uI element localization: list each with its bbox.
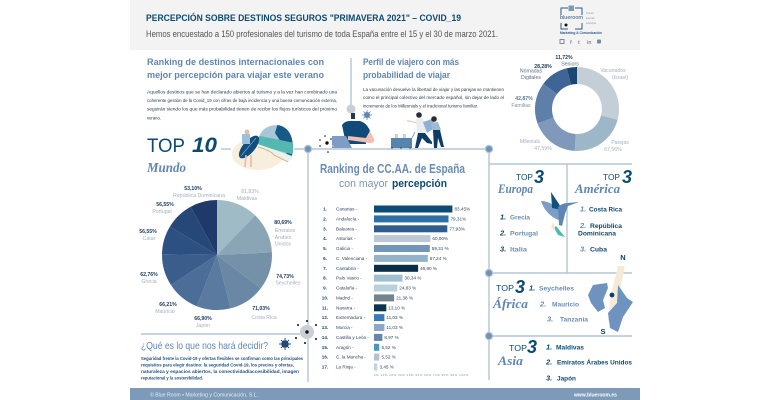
panel: top 3 África: TOP: [496, 283, 514, 293]
perfil text: incremento de los Millennials y el tradicional turismo familiar.: [363, 104, 478, 108]
bar chart: CC.AA.: Extremadura -: [336, 315, 366, 320]
pie labels: 62,76%: [140, 272, 158, 278]
donut chart: [511, 55, 629, 153]
pie labels: Grecia: [141, 279, 157, 285]
bar chart: CC.AA.: 11.: [322, 305, 328, 310]
panel: top 3 América: 3.: [580, 244, 586, 254]
subtitle: Hemos encuestado a 150 profesionales del turismo de toda España entre el 15 y el 30 de marzo 2021.: [146, 29, 498, 39]
logo: blueroom: [560, 15, 583, 21]
social icons: f: [570, 40, 572, 46]
panel: top 3 América: 3: [622, 167, 632, 187]
pie labels: 71,03%: [252, 306, 270, 312]
bar chart: CC.AA.: 5.: [323, 246, 327, 251]
pie labels: 66,21%: [159, 302, 177, 308]
bar chart: CC.AA.: Aragón -: [336, 345, 354, 350]
bar chart: CC.AA.: 24,83 %: [399, 286, 416, 290]
bar chart: CC.AA.: 17.: [322, 364, 328, 370]
heading: perfil de viajero: probabilidad de viajar: [363, 70, 450, 81]
bar chart: CC.AA.: 59,31 %: [432, 246, 449, 251]
pie chart: top 10 mundo: [139, 186, 301, 329]
question text: requisitos para elegir destino: la seguridad Covid-19, los precios y ofertas,: [141, 362, 294, 368]
panel: top 3 Asia: [497, 337, 632, 382]
perfil text: [363, 87, 505, 108]
panel: top 3 América: 2.: [579, 221, 586, 230]
panel: top 3 América: América: [574, 182, 620, 196]
icon: compass map: N: [620, 253, 626, 262]
panel: top 3 Asia: 1.: [546, 342, 552, 352]
bar chart: CC.AA.: 79,31%: [450, 216, 466, 221]
pie labels: [139, 186, 301, 329]
pie labels: Árabes: [275, 234, 292, 241]
icon: hummingbird: [541, 192, 579, 237]
connector lines: [221, 145, 632, 382]
panel: top 3 Europa: 1.: [500, 212, 506, 222]
intro text: verano.: [147, 116, 161, 120]
pie labels: República Dominicana: [173, 193, 225, 199]
bar chart: CC.AA.: 13,10 %: [388, 305, 405, 310]
panel: top 3 África: 2.: [539, 300, 546, 308]
bar chart: CC.AA.: 16.: [322, 355, 328, 360]
panel: top 3 Asia: Asia: [497, 354, 523, 368]
panel: top 3 Asia: Emiratos Árabes Unidos: [557, 358, 632, 366]
heading: ranking internacional: mejor percepción para viajar este verano: [147, 70, 324, 81]
donut labels: Nómadas: [520, 68, 543, 74]
icon: compass map: [588, 253, 633, 336]
bar chart: CC.AA.: Navarra -: [336, 305, 356, 310]
heading: perfil de viajero: Perfil de viajero con más: [363, 57, 459, 68]
panel: top 3 África: [492, 277, 589, 324]
donut labels: Digitales: [521, 75, 541, 81]
pie labels: Seychelles: [275, 280, 301, 286]
donut labels: 47,59%: [534, 146, 552, 152]
panel: top 3 Asia: 3: [527, 337, 537, 357]
bar chart: CC.AA.: 83,45%: [454, 206, 470, 212]
bar chart: CC.AA.: 46,90 %: [420, 266, 437, 271]
panel: top 3 América: [574, 167, 632, 254]
pie labels: Maldivas: [237, 196, 258, 202]
bar chart: CC.AA.: País Vasco -: [336, 276, 362, 281]
bar chart: CC.AA.: 15.: [322, 345, 328, 350]
panel: top 3 América: TOP: [603, 172, 620, 182]
ranking heading: [320, 162, 466, 190]
icon: compass map: S: [600, 327, 606, 336]
donut labels: 67,56%: [604, 147, 622, 153]
question heading: ¿Qué es lo que nos hará decidir?: [141, 340, 268, 352]
panel: top 3 Europa: Europa: [497, 182, 533, 196]
panel: top 3 Europa: Grecia: [510, 214, 531, 222]
panel: top 3 Asia: Japón: [557, 376, 576, 382]
bar chart: CC.AA.: 30,34 %: [404, 276, 421, 281]
panel: top 3 Asia: 2.: [545, 358, 552, 366]
bar chart: CC.AA.: 2.: [323, 216, 327, 221]
intro text: coherente gestión de la Covid_19 con cifras de baja incidencia y una buena comunicación externa,: [147, 98, 337, 103]
donut labels: Familias: [511, 103, 531, 109]
panel: top 3 América: 1.: [580, 204, 586, 214]
footer: [130, 388, 640, 400]
panel: top 3 África: 1.: [529, 284, 535, 292]
donut labels: 11,72%: [555, 55, 573, 61]
panel: top 3 África: 3: [515, 277, 525, 297]
intro text: seguirán siendo los que más probabilidad tienen de recibir los flujos turísticos del próximo: [147, 106, 338, 112]
bar chart: CC.AA.: Galicia -: [336, 246, 353, 251]
donut labels: Parejas: [611, 140, 629, 146]
pie labels: 53,10%: [184, 186, 202, 192]
donut labels: Vacunados: [600, 68, 626, 74]
bar chart: CC.AA.: 8.: [323, 276, 327, 281]
panel: top 3 África: Tanzania: [560, 316, 589, 324]
donut labels: [511, 55, 629, 153]
bar chart: CC.AA.: Castilla y León -: [336, 335, 369, 340]
bar chart: CC.AA.: 10.: [322, 295, 328, 300]
donut labels: 28,28%: [534, 64, 552, 70]
panel: top 3 Europa: 3.: [500, 244, 506, 254]
logo: Travel: [586, 11, 594, 15]
pie labels: Mauricio: [155, 309, 175, 315]
bar chart: CC.AA.: 8,97 %: [384, 335, 399, 340]
perfil text: como el principal colectivo del mercado español, sin dejar de lado el: [363, 95, 504, 100]
bar chart: CC.AA.: Baleares -: [336, 226, 357, 231]
panel: top 3 Europa: 3: [534, 167, 544, 187]
icon: small virus: [362, 110, 372, 120]
top 10 heading: [146, 134, 217, 176]
bar chart: CC.AA.: 3,45 %: [380, 364, 394, 370]
panel: top 3 África: Seychelles: [539, 286, 575, 292]
icon: virus dots: [319, 135, 334, 153]
bar chart: CC.AA.: Asturias -: [336, 236, 356, 241]
donut labels: Seniors: [561, 62, 579, 68]
bar chart: CC.AA.: 5,52 %: [382, 355, 396, 360]
pie labels: Unidos: [275, 242, 291, 248]
logo: Marketing & Comunicación: [560, 31, 602, 35]
bar chart: CC.AA.: 77,93%: [449, 226, 465, 231]
intro text: Aquellos destinos que se han declarado abiertos al turismo y a la vez han combinado una: [147, 90, 338, 94]
panel: top 3 Asia: Maldivas: [556, 344, 584, 352]
bar chart: CC.AA.: 57,24 %: [430, 256, 447, 261]
bar chart: CC.AA.: 11,03 %: [386, 325, 403, 330]
bar chart: CC.AA.: 4.: [323, 236, 327, 241]
social icons: t: [578, 40, 580, 46]
panel: top 3 Asia: TOP: [509, 343, 527, 353]
bar chart: CC.AA.: 3.: [323, 226, 327, 231]
panel: top 3 América: Costa Rica: [589, 206, 622, 214]
question text: Seguridad frente la Covid-19 y ofertas flexibles se confirman como las principales: [141, 356, 304, 361]
logo: [560, 6, 602, 46]
chart axis: 0% 10% 20% 30% 40% 50% 60% 70% 80% 90% 100%: [374, 373, 468, 377]
bar chart: CC.AA.: [322, 206, 470, 377]
bar chart: CC.AA.: 9.: [323, 286, 327, 290]
panel: top 3 Europa: Italia: [510, 246, 528, 254]
ranking heading: con mayor: [339, 178, 388, 190]
donut labels: (Israel): [612, 75, 628, 81]
bar chart: CC.AA.: 11,03 %: [386, 315, 403, 320]
footer: © Blue Room • Marketing y Comunicación, S.L.: [150, 392, 258, 398]
panel: top 3 África: Mauricio: [552, 302, 579, 308]
header band: [130, 0, 640, 50]
bar chart: CC.AA.: 5,52 %: [382, 345, 396, 350]
question text: reputacional y la sostenibilidad.: [141, 376, 203, 380]
pie labels: 80,69%: [274, 220, 292, 226]
panel: top 3 América: República: [590, 223, 622, 230]
panel: top 3 Europa: [497, 167, 544, 254]
social icons: in: [587, 40, 591, 46]
panel: top 3 Asia: 3.: [546, 374, 552, 382]
pie labels: 56,55%: [139, 229, 157, 235]
panel: top 3 Europa: 2.: [499, 228, 506, 238]
heading: perfil de viajero: [363, 57, 459, 81]
panel: top 3 América: Cuba: [590, 246, 607, 254]
bar chart: CC.AA.: Andalucía -: [336, 216, 360, 221]
pie labels: 74,73%: [276, 274, 294, 280]
panel: top 3 América: Dominicana: [578, 230, 616, 238]
icon: person with laptop: [332, 104, 374, 148]
donut labels: Milenials: [520, 139, 540, 145]
pie labels: 81,83%: [241, 189, 259, 195]
bar chart: CC.AA.: 7.: [323, 266, 327, 271]
pie labels: Japón: [196, 323, 210, 329]
top 10 heading: TOP: [147, 136, 185, 157]
pie labels: Catar: [143, 236, 156, 242]
bar chart: CC.AA.: 14.: [322, 335, 328, 340]
bar chart: CC.AA.: C. Valenciana -: [336, 256, 368, 261]
bar chart: CC.AA.: 21,38 %: [396, 295, 413, 300]
logo: Events: [586, 16, 595, 20]
icon: travellers with luggage: [391, 112, 444, 150]
intro text: [147, 90, 338, 120]
top 10 heading: Mundo: [146, 161, 186, 176]
pie labels: Portugal: [152, 209, 172, 215]
bar chart: CC.AA.: 12.: [322, 315, 328, 320]
top 10 heading: 10: [192, 134, 217, 157]
bar chart: CC.AA.: Cantabria -: [336, 266, 359, 271]
title: PERCEPCIÓN SOBRE DESTINOS SEGUROS "PRIMAVERA 2021" – COVID_19: [146, 12, 461, 24]
bar chart: CC.AA.: C. la Mancha -: [336, 355, 366, 360]
question text: [141, 356, 304, 380]
ranking heading: percepción: [392, 178, 447, 190]
ranking heading: Ranking de CC.AA. de España: [320, 162, 466, 176]
perfil text: La vacunación devuelve la libertad de viajar y las parejas se mantienen: [363, 87, 505, 92]
bar chart: CC.AA.: Canarias -: [336, 206, 358, 212]
heading: ranking internacional: Ranking de destinos internacionales con: [147, 57, 324, 68]
pie labels: 56,55%: [156, 202, 174, 208]
pie labels: 66,90%: [194, 316, 212, 322]
social icons: [560, 40, 601, 46]
question divider and virus: [141, 320, 317, 350]
footer: www.blueroom.es: [573, 392, 617, 398]
pie labels: Costa Rica: [251, 315, 277, 321]
bar chart: CC.AA.: 6.: [323, 256, 327, 261]
donut labels: 42,87%: [515, 96, 533, 102]
heading: ranking internacional: [147, 57, 324, 81]
question text: naturaleza y espacios abiertos, la conectividad/accesibilidad, imagen: [141, 369, 299, 374]
divider and traveller figure: [319, 58, 374, 153]
bar chart: CC.AA.: 60,00%: [432, 236, 448, 241]
bar chart: CC.AA.: 13.: [322, 325, 328, 330]
bar chart: CC.AA.: Murcia -: [336, 325, 353, 330]
logo: Lifestyle: [586, 21, 597, 25]
bar chart: CC.AA.: La Rioja -: [336, 364, 356, 370]
icon: beach surfer illustration: [232, 123, 295, 170]
panel: top 3 África: 3.: [547, 314, 553, 324]
panel: top 3 Europa: TOP: [516, 172, 533, 182]
panel: top 3 África: África: [492, 297, 528, 311]
bar chart: CC.AA.: Cataluña -: [336, 286, 358, 290]
bar chart: CC.AA.: 1.: [323, 206, 327, 212]
bar chart: CC.AA.: Madrid -: [336, 295, 353, 300]
pie labels: Emiratos: [275, 228, 296, 234]
panel: top 3 Europa: Portugal: [510, 230, 538, 238]
